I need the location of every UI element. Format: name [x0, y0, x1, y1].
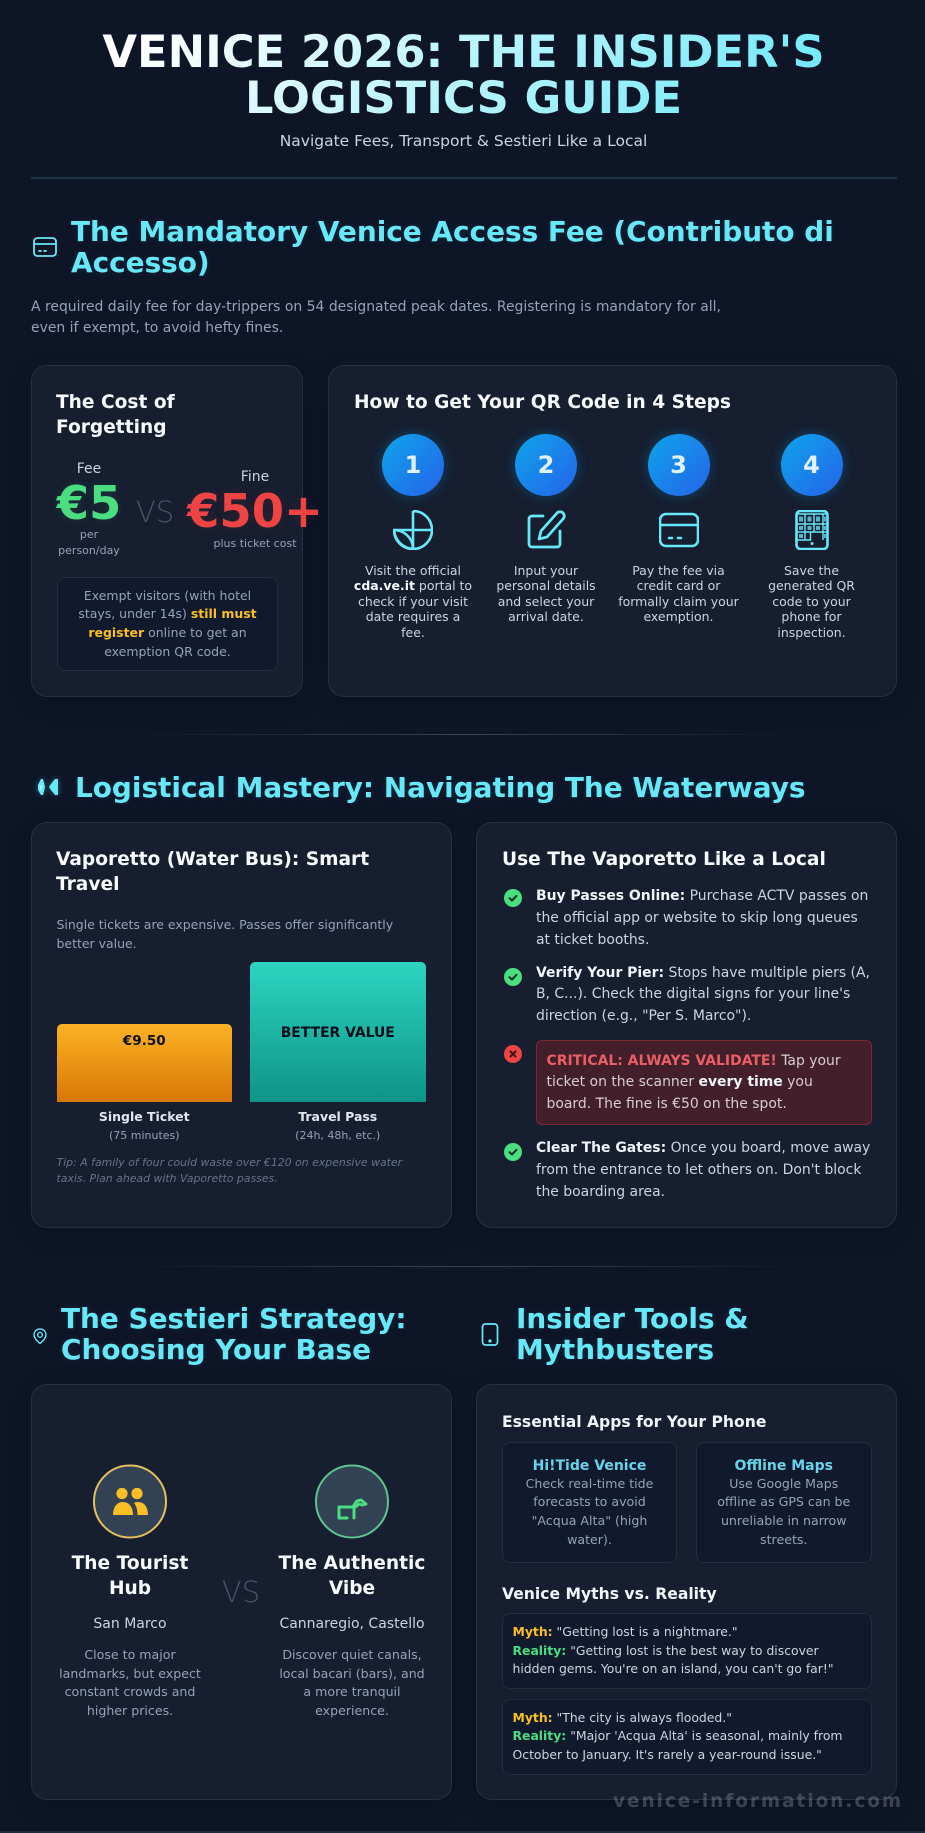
step text — [354, 562, 472, 640]
step text: formally claim your — [618, 594, 739, 609]
app: Hi!Tide Venice: forecasts to avoid — [533, 1494, 646, 1509]
myth card 1 — [502, 1613, 872, 1689]
step text: exemption. — [643, 609, 714, 624]
versus: VS — [222, 1575, 260, 1609]
step text: phone for — [781, 609, 842, 624]
section heading: access fee — [33, 215, 834, 279]
icon: people — [93, 1464, 167, 1539]
district description: constant crowds and — [65, 1684, 195, 1699]
heading text — [61, 1302, 406, 1366]
label: single ticket: Single Ticket — [99, 1109, 190, 1124]
icon: waterways — [34, 776, 62, 798]
tip: verify pier: direction (e.g., "Per S. Marco"). — [536, 1008, 751, 1024]
bar chart — [57, 962, 426, 1142]
label: travel pass: Travel Pass — [298, 1109, 377, 1124]
myth card 2 — [502, 1698, 872, 1774]
heading text — [516, 1303, 749, 1365]
callout: always validate: ticket on the scanner every time you — [546, 1074, 813, 1090]
step text — [618, 562, 739, 624]
district description: experience. — [315, 1703, 389, 1718]
tip: buy passes: at ticket booths. — [536, 932, 649, 948]
fee column — [56, 461, 121, 557]
tip: verify pier: Verify Your Pier: Stops have multiple piers (A, — [536, 964, 870, 980]
versus: VS — [136, 495, 174, 529]
district description — [50, 1646, 210, 1721]
step text: Visit the official — [365, 562, 461, 578]
fine column — [186, 469, 323, 550]
subtitle: Navigate Fees, Transport & Sestieri Like a Local — [280, 132, 647, 150]
district name: Vibe — [329, 1578, 375, 1599]
heading text: Choosing Your Base — [61, 1333, 371, 1366]
exemption note: stays, under 14s) still must — [78, 606, 257, 621]
heading: Vaporetto (Water Bus): Smart — [56, 849, 369, 870]
step text: cda.ve.it portal to — [354, 578, 472, 593]
exemption note: register online to get an — [88, 625, 247, 640]
description — [56, 917, 393, 951]
step text: check if your visit — [358, 594, 468, 609]
tip: verify pier — [536, 964, 870, 1024]
panel: sestieri comparison — [31, 1384, 452, 1800]
bar: single ticket — [56, 1024, 232, 1102]
step text: date requires a — [366, 609, 460, 624]
district name: The Authentic — [279, 1553, 425, 1574]
app: Offline Maps: streets. — [760, 1532, 807, 1547]
exemption note: Exempt visitors (with hotel — [84, 588, 251, 602]
step text: fee. — [401, 625, 425, 640]
icon: check — [504, 1143, 522, 1161]
step text — [496, 562, 596, 624]
district location: Cannaregio, Castello — [279, 1616, 425, 1632]
panel: the cost of forgetting — [31, 365, 303, 697]
bar: single ticket: €9.50 — [123, 1033, 166, 1049]
tip: taxis. Plan ahead with Vaporetto passes. — [56, 1172, 278, 1185]
panel: vaporetto smart travel — [31, 822, 452, 1228]
fine label: Fine — [241, 469, 269, 485]
district description: landmarks, but expect — [59, 1666, 201, 1681]
step text: arrival date. — [508, 609, 584, 624]
icon: map pin — [33, 1328, 47, 1344]
step number: 1 — [405, 450, 421, 478]
step text: code to your — [772, 594, 851, 609]
district name — [272, 1551, 432, 1601]
myth card 1: Myth: "Getting lost is a nightmare." — [512, 1624, 738, 1639]
step number: 2 — [538, 450, 554, 478]
heading text: Insider Tools & — [516, 1302, 749, 1335]
step text: Pay the fee via — [632, 562, 725, 578]
heading text: Logistical Mastery: Navigating The Waterways — [75, 771, 806, 804]
app: Hi!Tide Venice: Check real-time tide — [526, 1476, 653, 1490]
tip: Tip: A family of four could waste over €120 on expensive water — [56, 1156, 402, 1169]
icon: horse — [315, 1464, 389, 1539]
tip — [56, 1156, 403, 1185]
app: Hi!Tide Venice: water). — [567, 1532, 612, 1547]
label: travel pass: (24h, 48h, etc.) — [295, 1129, 380, 1142]
fee note — [58, 528, 120, 557]
bar: travel pass: BETTER VALUE — [281, 1025, 395, 1041]
app: Offline Maps: offline as GPS can be — [717, 1494, 850, 1509]
exemption note — [57, 577, 278, 671]
callout: always validate — [536, 1040, 872, 1125]
section intro — [31, 298, 721, 336]
fee note: person/day — [58, 544, 120, 557]
icon: check — [504, 968, 522, 986]
app: Offline Maps — [696, 1442, 872, 1563]
step text: credit card or — [637, 578, 720, 593]
tip: clear the gates: the boarding area. — [536, 1184, 665, 1200]
watermark: venice-information.com — [613, 1791, 903, 1812]
column: authentic vibe — [272, 1464, 432, 1724]
app: Hi!Tide Venice: Hi!Tide Venice — [533, 1458, 646, 1474]
heading text: The Sestieri Strategy: — [61, 1302, 406, 1335]
tip: clear the gates: from the entrance to let others on. Don't block — [536, 1162, 861, 1178]
bar: travel pass — [250, 962, 426, 1102]
myth card 2: Reality: "Major 'Acqua Alta' is seasonal, mainly from — [512, 1728, 843, 1743]
tip: clear the gates — [536, 1140, 870, 1200]
district description: a more tranquil — [303, 1684, 401, 1699]
tip: buy passes: Buy Passes Online: Purchase ACTV passes on — [536, 888, 868, 904]
step text: generated QR — [768, 578, 855, 593]
myth card 1: hidden gems. You're on an island, you can't go far!" — [512, 1661, 834, 1676]
step text: Input your — [514, 562, 578, 578]
icon: credit card — [33, 237, 57, 257]
callout: always validate: CRITICAL: ALWAYS VALIDATE! Tap your — [546, 1052, 841, 1068]
step 2 — [496, 428, 596, 624]
title: VENICE 2026: THE INSIDER'S — [102, 24, 825, 78]
icon: QR phone — [795, 510, 829, 550]
section heading: tools — [482, 1302, 749, 1366]
app: Hi!Tide Venice — [502, 1442, 677, 1563]
district description: Discover quiet canals, — [282, 1647, 422, 1662]
section heading: waterways — [34, 771, 806, 804]
title — [1, 28, 925, 120]
district description — [272, 1646, 432, 1721]
exemption note: exemption QR code. — [104, 644, 231, 659]
heading: myths: Venice Myths vs. Reality — [502, 1585, 717, 1603]
label: single ticket: (75 minutes) — [109, 1129, 180, 1142]
fine note: plus ticket cost — [213, 537, 297, 550]
district description: Close to major — [84, 1647, 176, 1662]
section heading: sestieri — [33, 1302, 406, 1366]
step number — [780, 434, 842, 496]
callout: always validate: board. The fine is €50 on the spot. — [546, 1096, 787, 1112]
tip: verify pier: B, C...). Check the digital signs for your line's — [536, 986, 850, 1002]
panel: tools and myths — [476, 1384, 897, 1800]
section intro: A required daily fee for day-trippers on 54 designated peak dates. Registering is mandatory for all, — [31, 298, 721, 314]
heading text: Accesso) — [71, 246, 210, 279]
label: single ticket — [99, 1109, 190, 1142]
panel: QR code steps — [328, 365, 897, 697]
section intro: even if exempt, to avoid hefty fines. — [31, 320, 283, 336]
district name: Hub — [109, 1578, 151, 1599]
icon: pencil square — [528, 510, 566, 548]
step text: and select your — [498, 594, 594, 609]
district description: local bacari (bars), and — [279, 1666, 425, 1681]
heading: How to Get Your QR Code in 4 Steps — [354, 392, 731, 413]
label: travel pass — [295, 1109, 380, 1142]
step 4 — [768, 428, 855, 640]
app: Offline Maps: Offline Maps — [735, 1458, 833, 1474]
step number — [382, 434, 444, 496]
description: better value. — [56, 936, 137, 951]
fee label: Fee — [77, 461, 101, 477]
heading: Travel — [56, 874, 119, 895]
myth card 1: Reality: "Getting lost is the best way to discover — [512, 1643, 819, 1658]
heading text — [71, 215, 834, 279]
app: Offline Maps: unreliable in narrow — [721, 1513, 847, 1528]
description: Single tickets are expensive. Passes offer significantly — [56, 917, 393, 932]
fine value: €50+ — [187, 484, 323, 538]
step text — [768, 562, 855, 640]
fee note: per — [80, 528, 98, 541]
icon: leaf pie — [393, 510, 433, 550]
tip: buy passes: the official app or website to skip long queues — [536, 910, 858, 926]
heading: The Cost of — [56, 392, 175, 413]
heading — [56, 392, 175, 438]
heading: apps: Essential Apps for Your Phone — [502, 1413, 766, 1431]
heading: Forgetting — [56, 417, 167, 438]
icon: credit card — [659, 512, 699, 548]
panel: use the vaporetto like a local — [476, 822, 897, 1228]
myth card 2: Myth: "The city is always flooded." — [512, 1710, 732, 1724]
app: Offline Maps: Use Google Maps — [729, 1476, 838, 1490]
step number — [515, 434, 577, 496]
district location: San Marco — [93, 1616, 167, 1632]
title: LOGISTICS GUIDE — [245, 70, 682, 124]
step text: personal details — [496, 578, 596, 593]
district name — [50, 1551, 210, 1601]
icon: phone — [482, 1323, 498, 1346]
heading — [56, 849, 369, 895]
icon: cross — [504, 1045, 522, 1063]
tip: buy passes — [536, 888, 868, 948]
column: tourist hub — [50, 1464, 210, 1724]
step text: Save the — [784, 562, 839, 578]
district description: higher prices. — [87, 1703, 173, 1718]
step 3 — [618, 428, 739, 624]
fee value: €5 — [57, 476, 121, 530]
heading: Use The Vaporetto Like a Local — [502, 849, 826, 870]
district name: The Tourist — [72, 1553, 188, 1574]
step number: 3 — [670, 450, 687, 478]
myth card 2: October to January. It's rarely a year-round issue." — [512, 1747, 822, 1762]
app: Hi!Tide Venice: "Acqua Alta" (high — [532, 1513, 647, 1528]
step number — [648, 434, 710, 496]
step 1 — [354, 428, 472, 640]
tip: clear the gates: Clear The Gates: Once you board, move away — [536, 1140, 870, 1156]
step text: inspection. — [777, 625, 846, 640]
heading text: The Mandatory Venice Access Fee (Contributo di — [71, 215, 834, 248]
icon: check — [504, 889, 522, 907]
step number: 4 — [803, 450, 820, 478]
heading text: Mythbusters — [516, 1333, 714, 1366]
